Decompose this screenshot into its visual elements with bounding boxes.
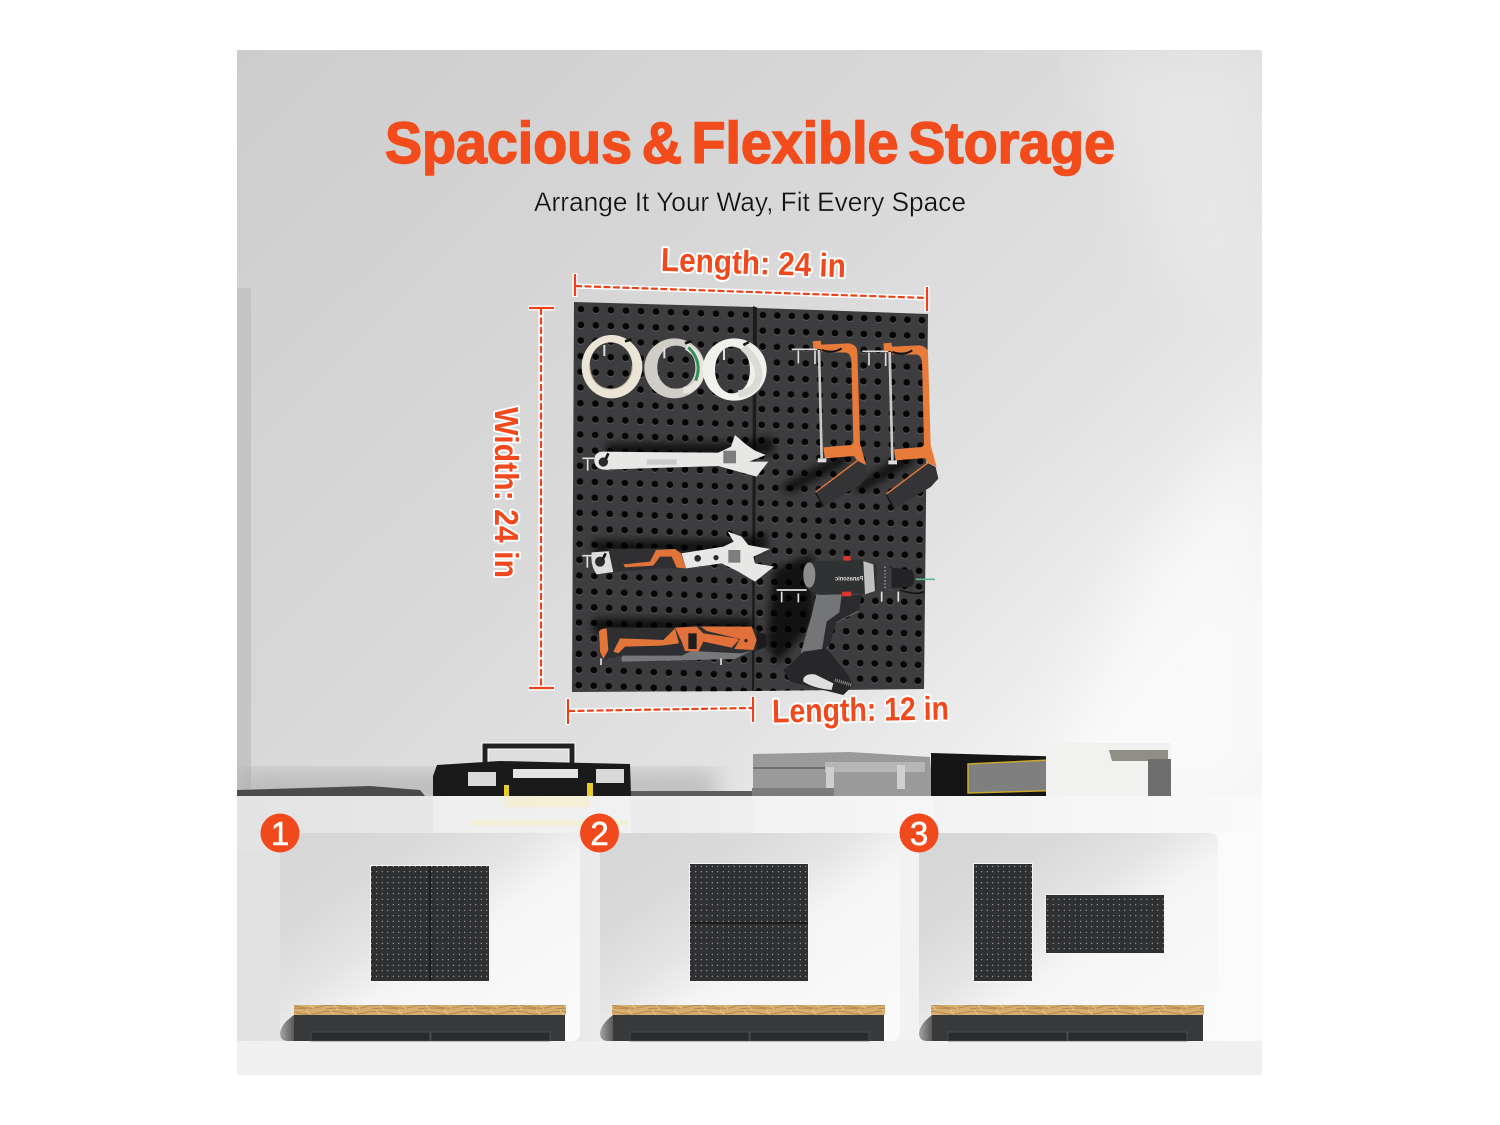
grey metal case [752, 752, 933, 796]
badge 1 [260, 814, 300, 852]
wide mini pegboard [1045, 894, 1165, 954]
black and yellow toolbox [433, 746, 631, 796]
dimension: width 24 in: Width: 24 in [488, 407, 525, 578]
tape rolls [582, 335, 767, 401]
tall mini pegboard [973, 863, 1033, 983]
black and yellow bin [931, 753, 1072, 796]
translucent table band [237, 796, 1262, 1075]
tape roll 1 [582, 335, 642, 398]
badge 2 [580, 814, 619, 852]
badge 3: 3 [910, 815, 928, 852]
cast shadows of the tools [593, 437, 913, 663]
white and grey block [1046, 743, 1171, 796]
option card 3: separated [919, 833, 1218, 1041]
dimension: length 24 in [575, 241, 927, 312]
hacksaw 1 [792, 341, 868, 507]
workbench [919, 1005, 1204, 1041]
subtitle: Arrange It Your Way, Fit Every Space [534, 187, 966, 217]
hacksaw 2 [862, 343, 938, 509]
panel seam [752, 306, 758, 691]
workbench [280, 1005, 566, 1041]
low dark case, far left [237, 786, 425, 796]
option card 2: stacked [600, 833, 900, 1041]
badge 3 [900, 814, 938, 852]
table back edge [631, 791, 753, 796]
title: Spacious & Flexible Storage [385, 111, 1115, 176]
mini pegboard [370, 865, 490, 983]
mini pegboard [689, 863, 809, 983]
dimension: length 12 in: Length: 12 in [772, 689, 949, 730]
pegboard: main assembled panels [572, 302, 928, 692]
toolboxes on the table [237, 743, 1171, 796]
cordless drill [777, 556, 935, 695]
tape roll 2 [644, 338, 705, 398]
cordless drill: Panasonic [835, 576, 863, 583]
tape roll 3 [703, 338, 767, 401]
adjustable wrench 1 [582, 435, 768, 477]
dimension: length 12 in [568, 689, 949, 730]
dimension: width 24 in [488, 308, 555, 688]
rotary screwdriver [599, 626, 767, 665]
workbench [600, 1005, 885, 1041]
right pegboard panel [754, 308, 928, 691]
option card 1: side by side [280, 833, 580, 1041]
adjustable wrench 2 [582, 532, 774, 582]
dimension: length 24 in: Length: 24 in [660, 241, 847, 284]
badge 2: 2 [590, 815, 609, 852]
wall background photo [237, 50, 1262, 810]
infographic canvas [237, 50, 1262, 1075]
badge 1: 1 [271, 815, 289, 852]
left pegboard panel [572, 302, 754, 692]
